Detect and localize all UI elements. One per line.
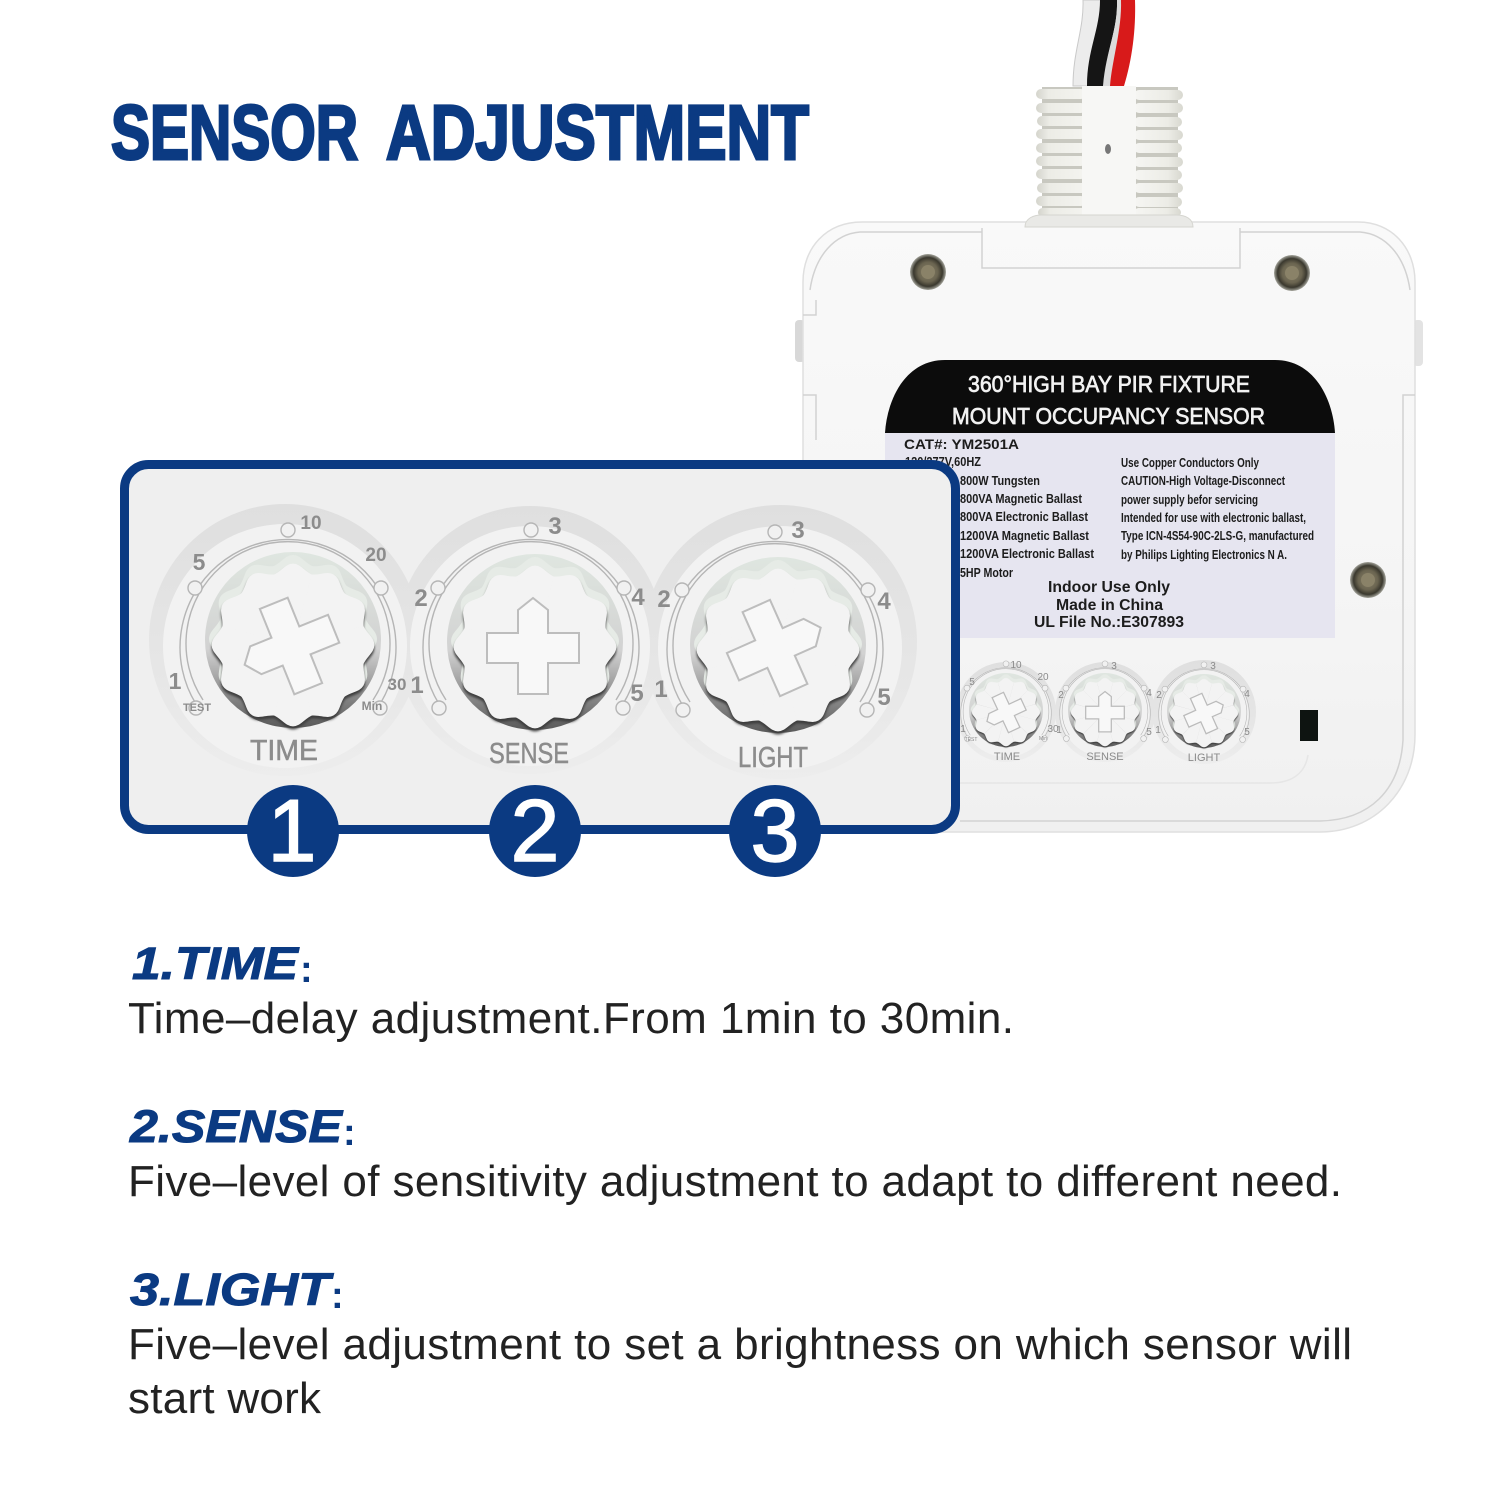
TIME heading: 1.TIME bbox=[132, 938, 300, 989]
small LIGHT dial: LIGHT bbox=[1188, 752, 1220, 764]
number badge 3 bbox=[729, 781, 821, 880]
section: TIME bbox=[128, 938, 1014, 1043]
label header bbox=[885, 360, 1335, 433]
caution column bbox=[1121, 456, 1314, 562]
title bbox=[111, 90, 809, 176]
magnified SENSE dial: 1 bbox=[410, 672, 424, 699]
magnified TIME dial: TIME bbox=[250, 735, 318, 767]
LIGHT description: start work bbox=[128, 1374, 322, 1423]
small TIME dial: 10 bbox=[1010, 660, 1022, 671]
number badge 3: 3 bbox=[751, 781, 799, 880]
LIGHT description bbox=[128, 1320, 1352, 1423]
title: ADJUSTMENT bbox=[386, 90, 809, 176]
label header text bbox=[952, 371, 1265, 429]
number badge 1 bbox=[247, 781, 339, 880]
small SENSE dial: SENSE bbox=[1086, 751, 1124, 763]
compliance text: Indoor Use Only bbox=[1048, 579, 1170, 596]
number badge 1: 1 bbox=[268, 781, 316, 880]
SENSE heading: : bbox=[343, 1112, 356, 1154]
indicator window bbox=[1300, 710, 1318, 741]
title: SENSOR bbox=[111, 90, 358, 176]
small SENSE dial: 2 bbox=[1058, 690, 1064, 701]
dial recesses bbox=[149, 504, 917, 779]
ratings column: 800VA Electronic Ballast bbox=[960, 510, 1089, 524]
product label bbox=[885, 360, 1335, 638]
ratings column: 800W Tungsten bbox=[960, 474, 1040, 488]
SENSE description: Five–level of sensitivity adjustment to adapt to different need. bbox=[128, 1157, 1342, 1206]
number badge 2 bbox=[489, 781, 581, 880]
small TIME dial: Min bbox=[1039, 736, 1047, 742]
LIGHT heading: 3.LIGHT bbox=[130, 1264, 334, 1315]
ratings column: 800VA Magnetic Ballast bbox=[960, 492, 1083, 506]
small LIGHT dial: 2 bbox=[1156, 690, 1162, 701]
small TIME dial: TIME bbox=[994, 751, 1020, 763]
magnified TIME dial: TEST bbox=[183, 702, 211, 714]
magnified TIME dial: 1 bbox=[169, 668, 182, 694]
screw: top left bbox=[910, 254, 946, 290]
screw: top right bbox=[1274, 255, 1310, 291]
screw: right bbox=[1350, 562, 1386, 598]
housing body bbox=[803, 222, 1415, 832]
section: LIGHT bbox=[128, 1264, 1352, 1423]
small SENSE dial: 4 bbox=[1146, 688, 1152, 699]
section: SENSE bbox=[128, 1101, 1342, 1206]
threaded conduit neck bbox=[1036, 86, 1183, 218]
LIGHT heading: : bbox=[331, 1275, 344, 1317]
sensor housing bbox=[795, 215, 1423, 832]
magnified dial panel bbox=[124, 464, 956, 830]
caution column: CAUTION-High Voltage-Disconnect bbox=[1121, 474, 1286, 488]
magnified LIGHT dial: LIGHT bbox=[738, 742, 808, 774]
small dial recesses bbox=[956, 660, 1256, 764]
LIGHT description: Five–level adjustment to set a brightness on which sensor will bbox=[128, 1320, 1352, 1369]
label background bbox=[885, 432, 1335, 638]
small SENSE dial: 1 bbox=[1056, 725, 1062, 736]
magnified TIME dial: 10 bbox=[300, 513, 322, 534]
ratings column: 120/277V,60HZ bbox=[905, 455, 981, 469]
small SENSE dial: 3 bbox=[1111, 661, 1117, 672]
caution column: Type ICN-4S54-90C-2LS-G, manufactured bbox=[1121, 529, 1314, 543]
magnified LIGHT dial: 3 bbox=[791, 517, 805, 544]
conduit flange bbox=[1025, 215, 1193, 227]
small dials on housing bbox=[956, 660, 1318, 764]
housing seams bbox=[803, 228, 1415, 821]
caution column: power supply befor servicing bbox=[1121, 493, 1258, 507]
magnified TIME dial: 20 bbox=[365, 545, 387, 566]
small TIME dial: 20 bbox=[1037, 672, 1049, 683]
side tabs bbox=[795, 320, 1423, 366]
small LIGHT dial bbox=[1155, 661, 1250, 764]
small LIGHT dial: 1 bbox=[1155, 725, 1161, 736]
small LIGHT dial: 3 bbox=[1210, 661, 1216, 672]
magnified LIGHT dial: 4 bbox=[877, 588, 891, 615]
small TIME dial: 30 bbox=[1047, 724, 1059, 735]
magnified TIME dial: Min bbox=[362, 699, 382, 713]
number badge 2: 2 bbox=[511, 781, 559, 880]
magnified LIGHT dial bbox=[654, 517, 891, 774]
label header text: MOUNT OCCUPANCY SENSOR bbox=[952, 403, 1265, 429]
SENSE heading: 2.SENSE bbox=[129, 1101, 344, 1152]
TIME heading: : bbox=[300, 949, 313, 991]
small SENSE dial: 5 bbox=[1146, 727, 1152, 738]
magnified TIME dial: 5 bbox=[193, 549, 206, 575]
compliance text bbox=[1034, 579, 1184, 631]
compliance text: UL File No.:E307893 bbox=[1034, 614, 1184, 631]
small LIGHT dial: 5 bbox=[1244, 727, 1250, 738]
panel frame bbox=[124, 464, 956, 830]
caution column: Intended for use with electronic ballast, bbox=[1121, 511, 1306, 525]
magnified TIME dial bbox=[169, 513, 406, 767]
small TIME dial bbox=[960, 660, 1059, 763]
ratings column bbox=[904, 436, 1095, 580]
compliance text: Made in China bbox=[1056, 597, 1163, 614]
magnified SENSE dial: 5 bbox=[630, 680, 644, 707]
TIME description: Time–delay adjustment.From 1min to 30min. bbox=[128, 994, 1014, 1043]
small TIME dial: 5 bbox=[969, 677, 975, 688]
magnified LIGHT dial: 1 bbox=[654, 676, 668, 703]
small SENSE dial bbox=[1056, 661, 1152, 763]
magnified TIME dial: 30 bbox=[388, 675, 406, 694]
small LIGHT dial: 4 bbox=[1244, 689, 1250, 700]
magnified LIGHT dial: 5 bbox=[877, 684, 891, 711]
small TIME dial: TEST bbox=[965, 737, 977, 743]
magnified SENSE dial: 2 bbox=[414, 585, 428, 612]
magnified SENSE dial bbox=[410, 513, 645, 770]
wires bbox=[1073, 0, 1135, 86]
small TIME dial: 1 bbox=[960, 724, 966, 735]
caution column: Use Copper Conductors Only bbox=[1121, 456, 1259, 470]
ratings column: CAT#: YM2501A bbox=[904, 436, 1019, 452]
ratings column: 5HP Motor bbox=[960, 566, 1013, 580]
magnified SENSE dial: SENSE bbox=[489, 738, 569, 770]
ratings column: 1200VA Magnetic Ballast bbox=[960, 529, 1090, 543]
ratings column: 1200VA Electronic Ballast bbox=[960, 547, 1095, 561]
label header text: 360°HIGH BAY PIR FIXTURE bbox=[968, 371, 1250, 397]
magnified SENSE dial: 3 bbox=[548, 513, 562, 540]
magnified SENSE dial: 4 bbox=[631, 584, 645, 611]
magnified LIGHT dial: 2 bbox=[657, 586, 671, 613]
caution column: by Philips Lighting Electronics N A. bbox=[1121, 548, 1287, 562]
